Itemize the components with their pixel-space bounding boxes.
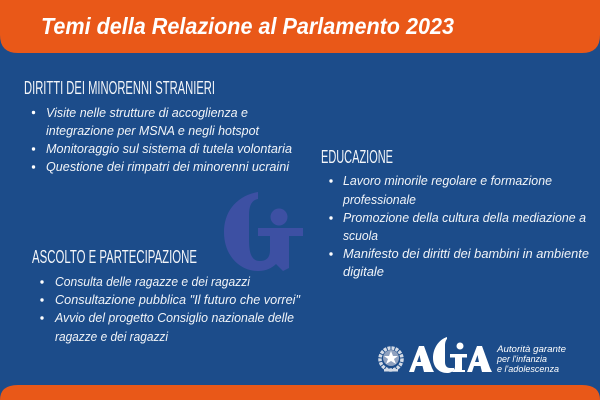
bullet list: Educazione: Manifesto dei diritti dei bambini in ambiente <box>343 246 589 261</box>
section: Educazione <box>321 146 589 279</box>
bottom banner <box>0 385 600 400</box>
logo caption: e l'adolescenza <box>497 364 559 375</box>
bullet list: Ascolto e partecipazione: Consulta delle ragazze e dei ragazzi <box>55 274 251 289</box>
bullet list: Educazione: scuola <box>343 228 378 243</box>
bullet list: Ascolto e partecipazione: Avvio del progetto Consiglio nazionale delle <box>54 310 294 325</box>
bullet list: Educazione: digitale <box>343 264 384 279</box>
section: Diritti dei minorenni stranieri <box>24 77 292 174</box>
bullet list: Ascolto e partecipazione: ragazze e dei ragazzi <box>55 329 169 344</box>
bullet list: Diritti dei minorenni stranieri: Monitoraggio sul sistema di tutela volontaria <box>46 141 292 156</box>
logo caption: Autorità garante <box>496 344 566 355</box>
heading: Ascolto e partecipazione: ASCOLTO E PARTECIPAZIONE <box>32 246 197 267</box>
bullet list: Ascolto e partecipazione <box>40 274 301 344</box>
top banner <box>0 0 600 53</box>
watermark logo: Gi monogram <box>224 192 303 271</box>
bullet list: Educazione: professionale <box>342 192 416 207</box>
bullet list: Diritti dei minorenni stranieri: integrazione per MSNA e negli hotspot <box>46 123 260 138</box>
heading: Educazione: EDUCAZIONE <box>321 146 393 167</box>
heading: Diritti dei minorenni stranieri: DIRITTI DEI MINORENNI STRANIERI <box>24 77 215 98</box>
title: Temi della Relazione al Parlamento 2023 <box>41 13 454 39</box>
bullet list: Diritti dei minorenni stranieri: Questione dei rimpatri dei minorenni ucraini <box>46 159 290 174</box>
bullet list: Educazione: Promozione della cultura della mediazione a <box>343 210 586 225</box>
AGIA logo <box>380 337 566 375</box>
bullet list: Ascolto e partecipazione: Consultazione pubblica "Il futuro che vorrei" <box>55 292 301 307</box>
section: Ascolto e partecipazione <box>32 246 301 344</box>
logo caption <box>496 344 566 375</box>
icon: emblem of the Republic <box>380 348 402 372</box>
logo wordmark <box>409 337 492 373</box>
logo caption: per l'infanzia <box>496 354 547 365</box>
bullet list: Educazione <box>329 173 589 279</box>
bullet list: Diritti dei minorenni stranieri <box>32 105 292 174</box>
bullet list: Diritti dei minorenni stranieri: Visite nelle strutture di accoglienza e <box>46 105 248 120</box>
bullet list: Educazione: Lavoro minorile regolare e formazione <box>343 173 552 188</box>
